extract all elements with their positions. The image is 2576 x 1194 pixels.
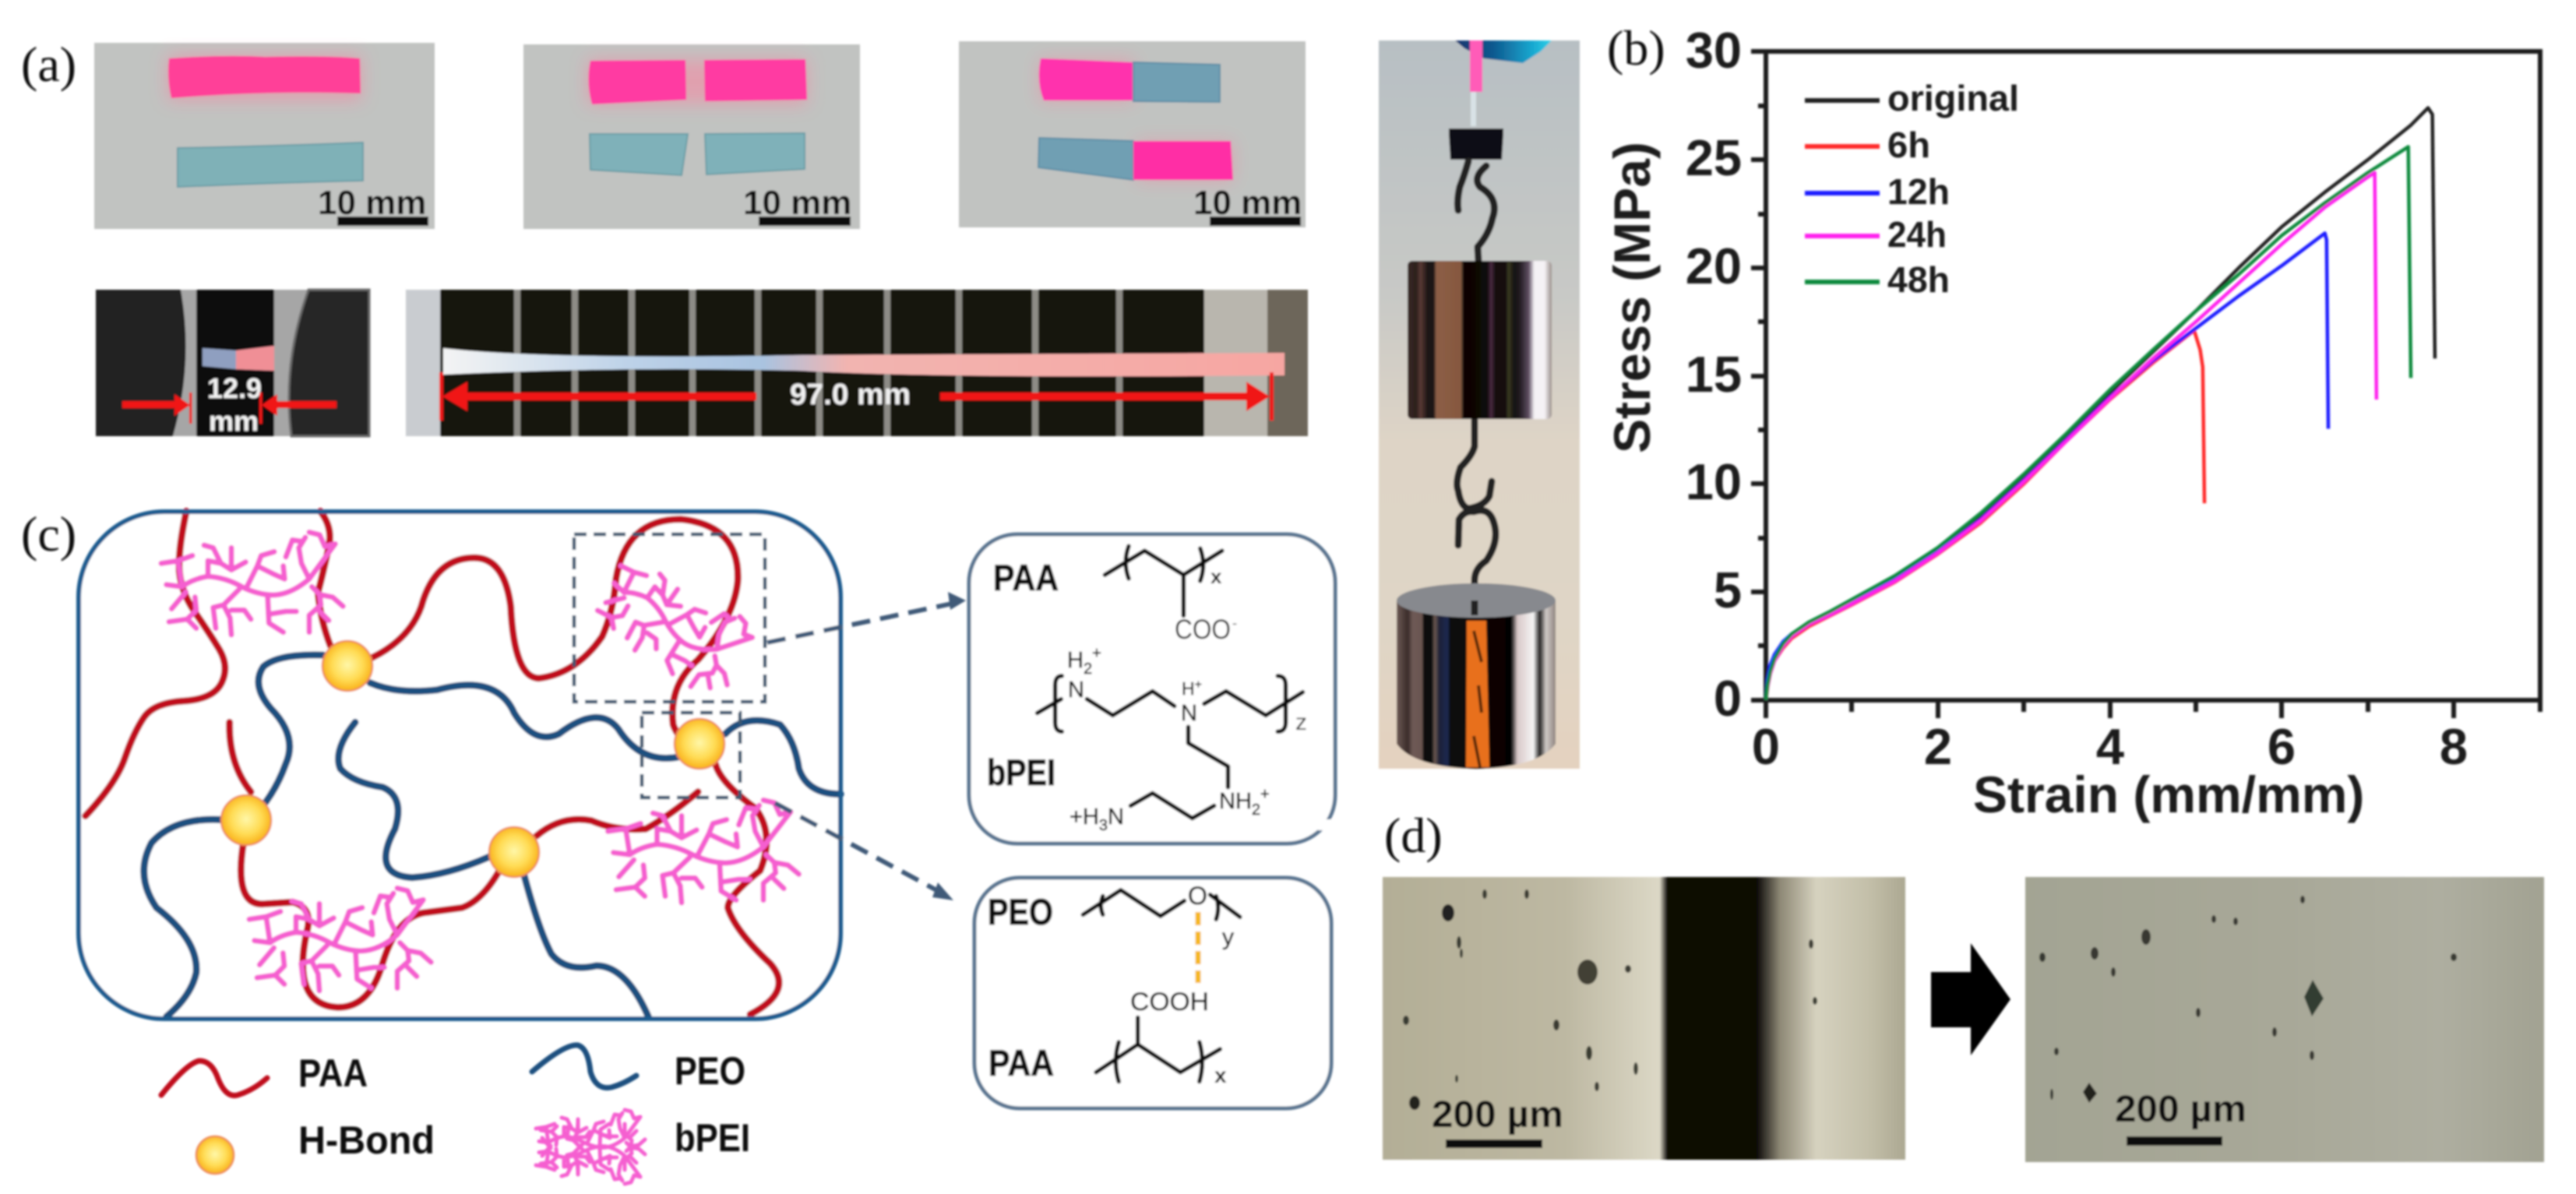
panel label (c): (c): [21, 506, 76, 562]
stress-strain curves: [1766, 108, 2435, 700]
panel (b): stress-strain chart: [1603, 22, 2540, 823]
chemical structure box: PEO and PAA: [974, 878, 1331, 1108]
PAA structure: COO: [1175, 615, 1231, 645]
bPEI structure: N: [1108, 805, 1124, 829]
PEO chains (blue): [144, 655, 840, 1016]
PAA structure with COOH: COOH: [1130, 988, 1209, 1016]
strip: healed upper film: [1039, 58, 1220, 102]
PAA structure: x: [1210, 565, 1222, 588]
specimen strip: [203, 346, 274, 371]
PAA structure: -: [1232, 615, 1237, 631]
panel (d): micrograph of scratched film: [1383, 877, 1905, 1160]
legend: 6h: 6h: [1887, 125, 1930, 165]
PEO structure: y: [1222, 925, 1234, 950]
gauge length label: [207, 372, 262, 437]
PEO label: PEO: [988, 891, 1053, 932]
blue glove: [1455, 41, 1552, 63]
bPEI structure: NH: [1219, 789, 1252, 814]
x axis tick labels: 4: [2096, 718, 2124, 775]
red length arrows: [439, 372, 1274, 421]
y axis tick labels: [1686, 22, 1742, 727]
y axis tick labels: 30: [1686, 22, 1742, 79]
PAA label: PAA: [993, 557, 1059, 598]
bPEI structure: 2: [1252, 801, 1260, 819]
x axis tick labels: 0: [1752, 718, 1780, 775]
bPEI structure: 3: [1099, 817, 1108, 834]
legend: PAA: PAA: [298, 1051, 368, 1095]
panel label (b): (b): [1607, 20, 1665, 76]
bPEI label: bPEI: [987, 752, 1055, 793]
strip: healed lower film: [1038, 138, 1233, 180]
bPEI structure: z: [1295, 710, 1307, 735]
binder clip: [1449, 129, 1503, 160]
dashed zoom boxes: [574, 534, 765, 798]
legend: PAA: [161, 1051, 368, 1096]
legend: 24h: 24h: [1887, 214, 1947, 255]
y axis tick labels: 5: [1714, 562, 1742, 618]
legend: original: original: [1887, 78, 2019, 118]
bPEI structure: H: [1182, 678, 1195, 699]
y axis tick labels: 15: [1686, 346, 1742, 403]
bPEI structure: N: [1181, 701, 1197, 726]
length label: 97.0 mm: [790, 379, 911, 411]
upper chrome weight: [1408, 261, 1552, 419]
panel (a): photo of healed film strips: [959, 41, 1306, 227]
y axis tick labels: 25: [1686, 129, 1742, 186]
legend for network schematic: [161, 1045, 750, 1184]
panel (d): micrograph of healed film: [2025, 877, 2544, 1162]
scale bar 200 µm: 200 µm: [1432, 1094, 1563, 1136]
arrow: scratch to healed: [1931, 943, 2010, 1055]
y axis tick labels: 0: [1714, 670, 1742, 727]
panel (a): photo of intact film strips: [94, 43, 435, 229]
panel (a): tensile photo at full stretch: [406, 290, 1308, 436]
legend: PEO: [532, 1045, 745, 1093]
red gauge arrows: [122, 393, 337, 424]
arrow: zoom to PAA and bPEI structures: [767, 592, 966, 643]
x axis title: Strain (mm/mm): [1973, 766, 2364, 823]
x axis tick labels: 2: [1924, 718, 1952, 775]
legend: H-Bond: [196, 1118, 435, 1174]
bPEI structure: H: [1067, 648, 1084, 673]
x axis tick labels: [1752, 718, 2468, 775]
bPEI structure: [1038, 645, 1307, 834]
hydrogen bond nodes: [221, 641, 724, 877]
bPEI structure: +: [1195, 678, 1202, 692]
PEO structure: O: [1188, 882, 1207, 910]
legend: H-Bond: H-Bond: [298, 1118, 435, 1162]
panel label (d): (d): [1384, 808, 1443, 863]
gauge length label: 12.9: [207, 372, 262, 404]
legend: 12h: 12h: [1887, 171, 1950, 212]
scale bar 10 mm: 10 mm: [318, 184, 426, 222]
strip: intact blue film: [178, 143, 363, 187]
chemical structure box: PAA and bPEI: [969, 534, 1338, 844]
y axis tick labels: 10: [1686, 453, 1742, 510]
scale bar 10 mm: 10 mm: [743, 184, 851, 222]
bPEI clusters (pink): [161, 532, 799, 991]
panel (c): polymer network schematic: [79, 512, 840, 1019]
wire hooks: [1457, 161, 1496, 613]
photo: healed film holding two hanging weights: [1379, 41, 1580, 769]
strip: intact pink film: [168, 56, 361, 98]
legend: bPEI: [536, 1110, 750, 1184]
chart legend: [1805, 78, 2019, 300]
legend: bPEI: bPEI: [675, 1116, 750, 1160]
lower chrome weight: [1397, 583, 1556, 769]
hanging film strip: [1470, 41, 1482, 126]
panel label (a): (a): [21, 37, 76, 92]
PAA label: PAA: [988, 1042, 1054, 1083]
strips: cut pink pieces: [588, 59, 807, 104]
bPEI structure: +H: [1070, 805, 1099, 829]
PEO structure: [1083, 882, 1240, 950]
bPEI structure: +: [1260, 786, 1270, 803]
network outline: [79, 512, 840, 1019]
y axis title: Stress (MPa): [1603, 142, 1661, 453]
stretched specimen strip: [443, 348, 1284, 376]
x axis tick labels: 6: [2268, 718, 2296, 775]
PAA chains (red): [86, 512, 779, 1014]
bPEI structure: +: [1092, 645, 1101, 662]
legend: PEO: PEO: [675, 1049, 745, 1093]
panel (a): photo of cut film strips: [523, 44, 860, 229]
bPEI structure: 2: [1084, 660, 1092, 678]
panel (a): tensile grip photo before stretching: [96, 290, 369, 437]
PAA structure with COOH: x: [1214, 1063, 1227, 1087]
hydrogen bond dashed line: [1195, 912, 1201, 983]
surface particles: [2039, 896, 2457, 1103]
PAA structure: [1105, 546, 1237, 645]
PAA structure with COOH: [1096, 988, 1227, 1087]
arrow: zoom to PEO and PAA structures: [775, 803, 953, 900]
scale bar 200 µm: 200 µm: [2115, 1089, 2247, 1130]
bPEI structure: N: [1068, 678, 1084, 703]
gauge length label: mm: [209, 405, 259, 437]
scale bar 10 mm: 10 mm: [1193, 184, 1302, 222]
legend: 48h: 48h: [1887, 259, 1950, 300]
surface particles: [1403, 889, 1817, 1110]
x axis tick labels: 8: [2440, 718, 2468, 775]
y axis tick labels: 20: [1686, 238, 1742, 294]
chart frame and ticks: [1751, 51, 2540, 718]
strips: cut blue pieces: [590, 133, 805, 175]
